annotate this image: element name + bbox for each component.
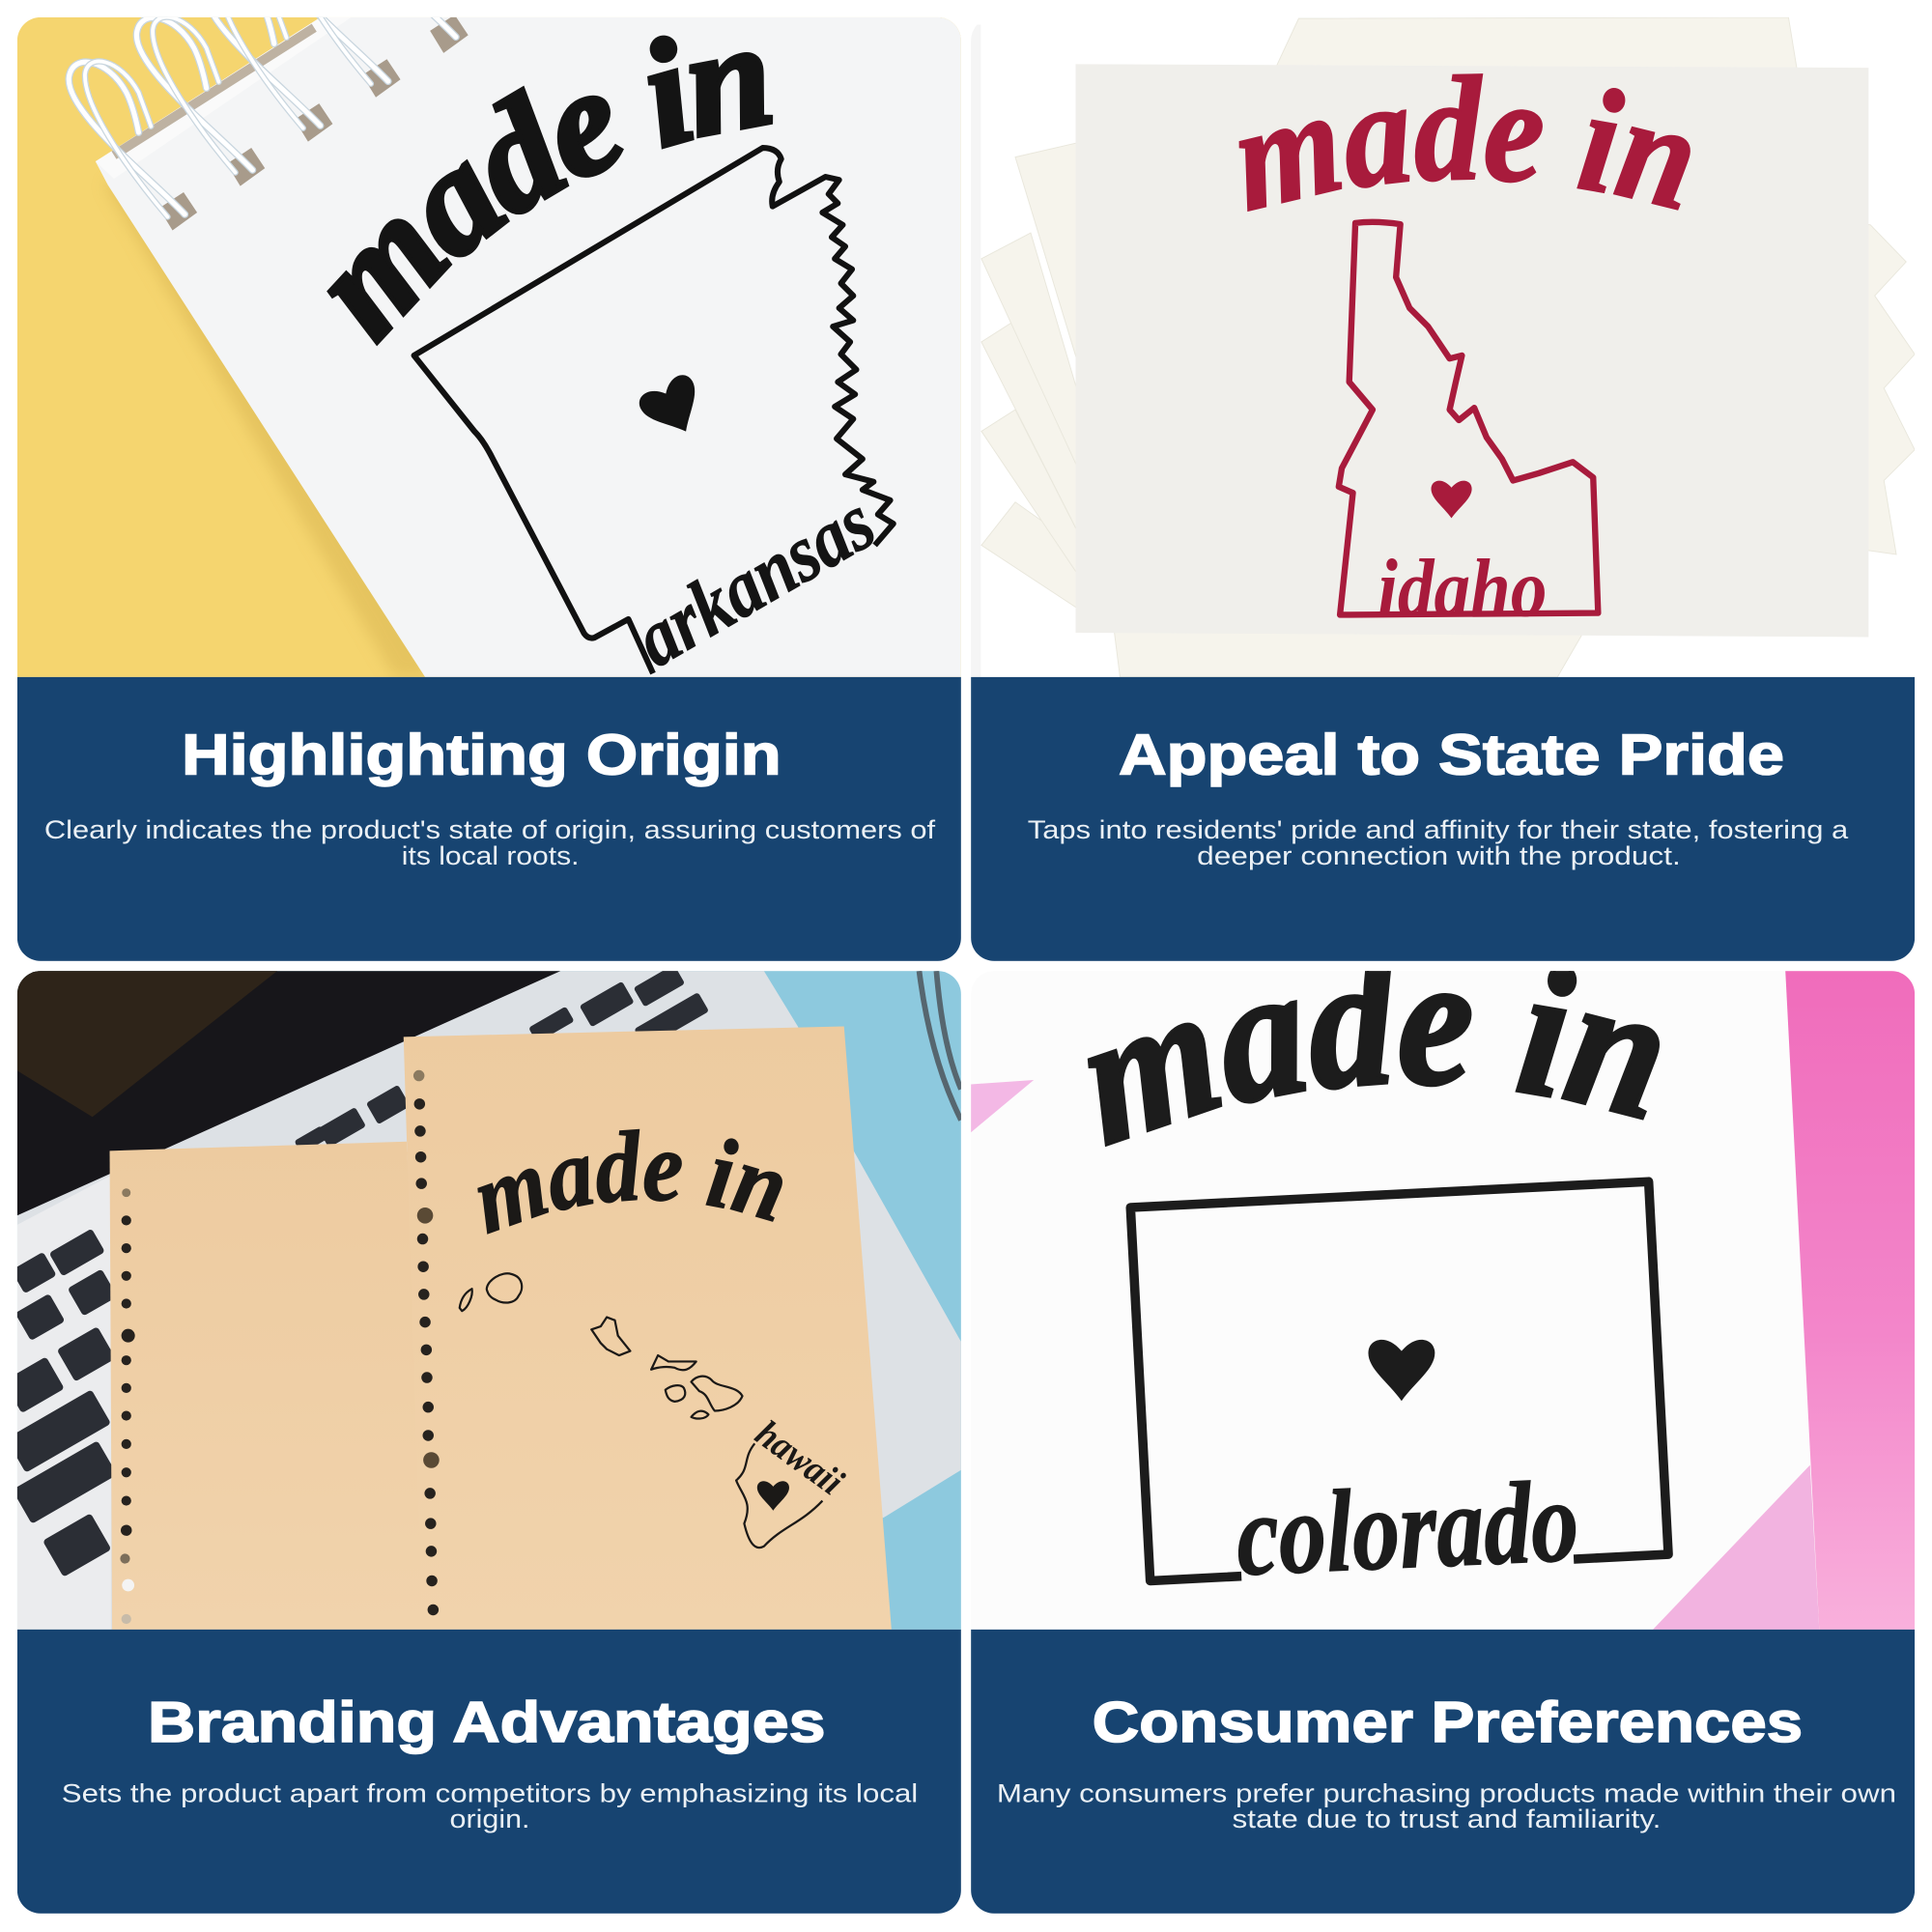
- lettering: made in: made in: [1088, 971, 1660, 1148]
- notebook spiral rings: [69, 0, 469, 231]
- photo: Idaho cards: [972, 17, 1915, 677]
- photo: Hawaii notebook on laptop: [17, 971, 961, 1630]
- description: Many consumers prefer purchasing products made within their own: [997, 1778, 1896, 1807]
- description: deeper connection with the product.: [1197, 841, 1681, 870]
- description: [45, 819, 935, 866]
- glasses: [920, 971, 961, 1120]
- lettering: colorado: colorado: [1234, 1457, 1581, 1601]
- lettering: made in: made in: [1238, 73, 1690, 213]
- description: state due to trust and familiarity.: [1233, 1804, 1661, 1833]
- state outline: Arkansas: [414, 148, 894, 673]
- lettering: made in: made in: [327, 35, 773, 346]
- kraft notebook pages: [110, 1142, 431, 1630]
- description: its local roots.: [402, 841, 579, 870]
- panel: Appeal to State Pride: [971, 17, 1915, 961]
- fanned background cards: [981, 17, 1915, 677]
- lettering: hawaii: hawaii: [748, 1411, 851, 1503]
- description: Clearly indicates the product's state of origin, assuring customers of: [44, 815, 936, 844]
- description: origin.: [450, 1804, 529, 1833]
- laptop body: [17, 971, 961, 1630]
- icon: heart: [757, 1481, 789, 1511]
- description: [62, 1778, 918, 1833]
- heading: Highlighting Origin: [182, 723, 781, 787]
- panel: Branding Advantages: [17, 971, 961, 1914]
- panel: Consumer Preferences: [971, 971, 1915, 1914]
- description: [997, 1778, 1896, 1833]
- punched holes: [120, 1070, 440, 1624]
- keyboard keys: [3, 964, 709, 1577]
- description: Taps into residents' pride and affinity for their state, fostering a: [1028, 815, 1848, 844]
- panel: Highlighting Origin: [17, 17, 961, 961]
- lettering: made in: made in: [477, 1128, 782, 1235]
- heading: Appeal to State Pride: [1119, 723, 1784, 787]
- lettering: colorado: [1238, 1480, 1577, 1580]
- icon: heart: [639, 375, 696, 432]
- caption block: [17, 1630, 961, 1914]
- lettering: idaho: idaho: [1378, 542, 1547, 635]
- icon: heart: [1368, 1340, 1435, 1401]
- caption block: [971, 1630, 1915, 1914]
- heading: Consumer Preferences: [1093, 1690, 1803, 1754]
- photo: Arkansas notebook on yellow: [17, 17, 961, 677]
- state outline: Idaho: [1339, 222, 1598, 614]
- lettering: arkansas: arkansas: [620, 477, 890, 684]
- state outline: Colorado: [1130, 1181, 1668, 1580]
- caption block: [971, 677, 1915, 961]
- description: Sets the product apart from competitors by emphasizing its local: [62, 1778, 918, 1807]
- caption block: [17, 677, 961, 961]
- photo: Colorado print on pink: [971, 971, 1915, 1630]
- description: [1028, 815, 1848, 870]
- island outlines: Hawaii: [460, 1273, 822, 1548]
- heading: Branding Advantages: [148, 1690, 826, 1754]
- icon: heart: [1432, 481, 1472, 518]
